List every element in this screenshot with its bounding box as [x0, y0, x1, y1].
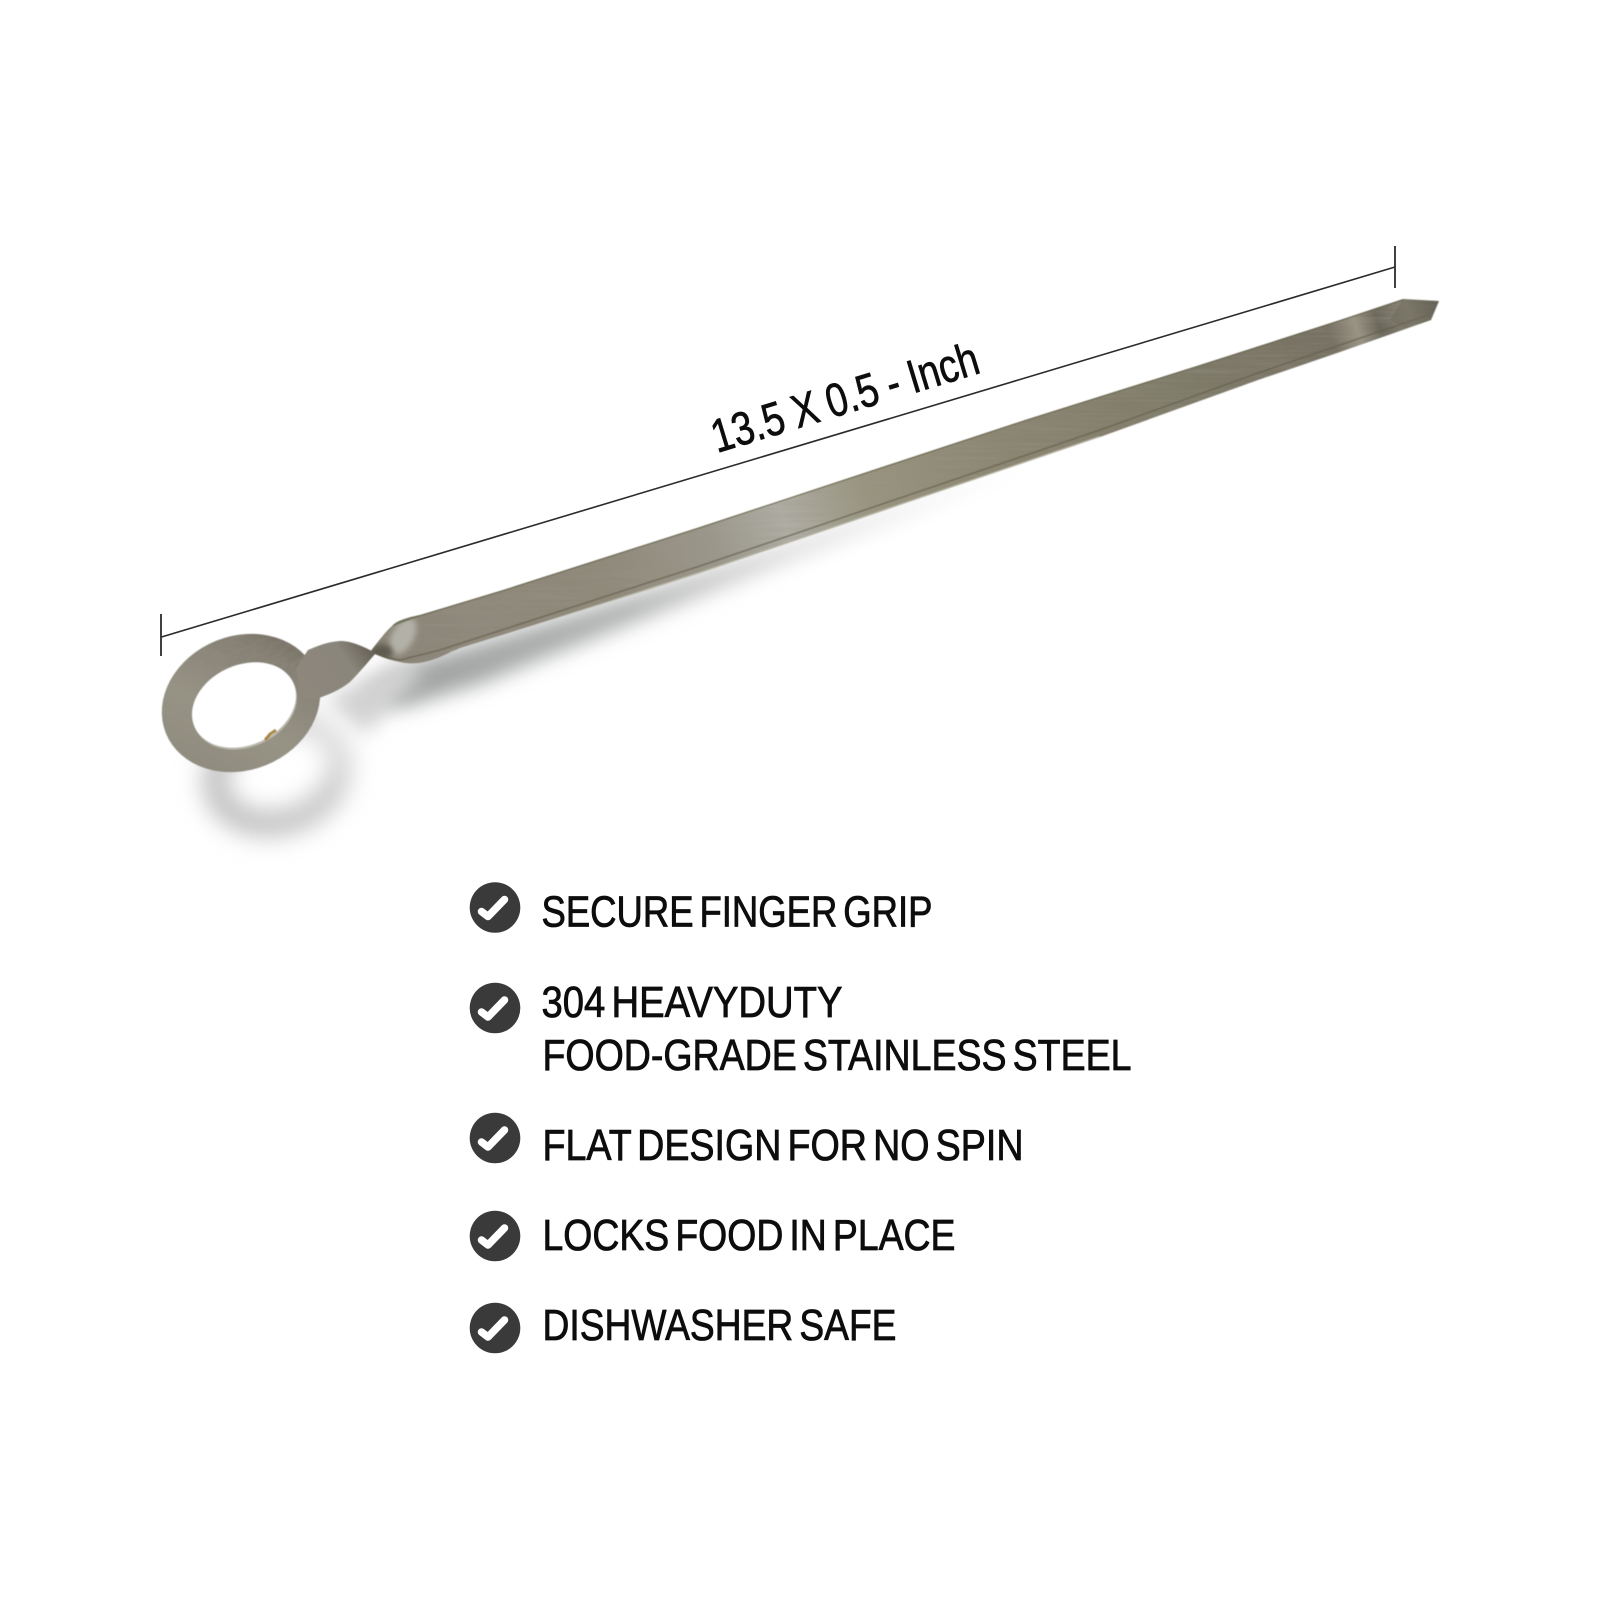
icon: check	[470, 1113, 520, 1163]
dimension line	[161, 246, 1395, 656]
feature: 304 heavy duty steel: 304 HEAVYDUTY	[542, 979, 842, 1027]
dimension label: 13.5 X 0.5 - Inch	[704, 331, 985, 463]
feature: 304 heavy duty steel: FOOD-GRADE STAINLESS STEEL	[542, 1032, 1132, 1080]
feature: secure finger grip	[470, 882, 932, 936]
feature list	[470, 882, 1132, 1353]
feature: 304 heavy duty steel	[470, 979, 1132, 1080]
feature: flat design	[470, 1113, 1024, 1170]
skewer neck twist	[296, 641, 376, 700]
icon: check	[470, 983, 520, 1033]
feature: dishwasher safe: DISHWASHER SAFE	[542, 1302, 896, 1350]
skewer ring handle	[134, 603, 348, 803]
feature: flat design: FLAT DESIGN FOR NO SPIN	[542, 1122, 1024, 1170]
skewer	[161, 298, 1440, 773]
feature: secure finger grip: SECURE FINGER GRIP	[542, 888, 932, 936]
feature: locks food: LOCKS FOOD IN PLACE	[542, 1212, 956, 1260]
icon: check	[470, 882, 520, 933]
icon: check	[470, 1211, 520, 1261]
icon: check	[470, 1303, 520, 1353]
infographic canvas	[160, 246, 1440, 1354]
skewer blade	[370, 298, 1440, 664]
feature: dishwasher safe	[470, 1302, 896, 1353]
shadow under skewer	[201, 450, 1060, 841]
